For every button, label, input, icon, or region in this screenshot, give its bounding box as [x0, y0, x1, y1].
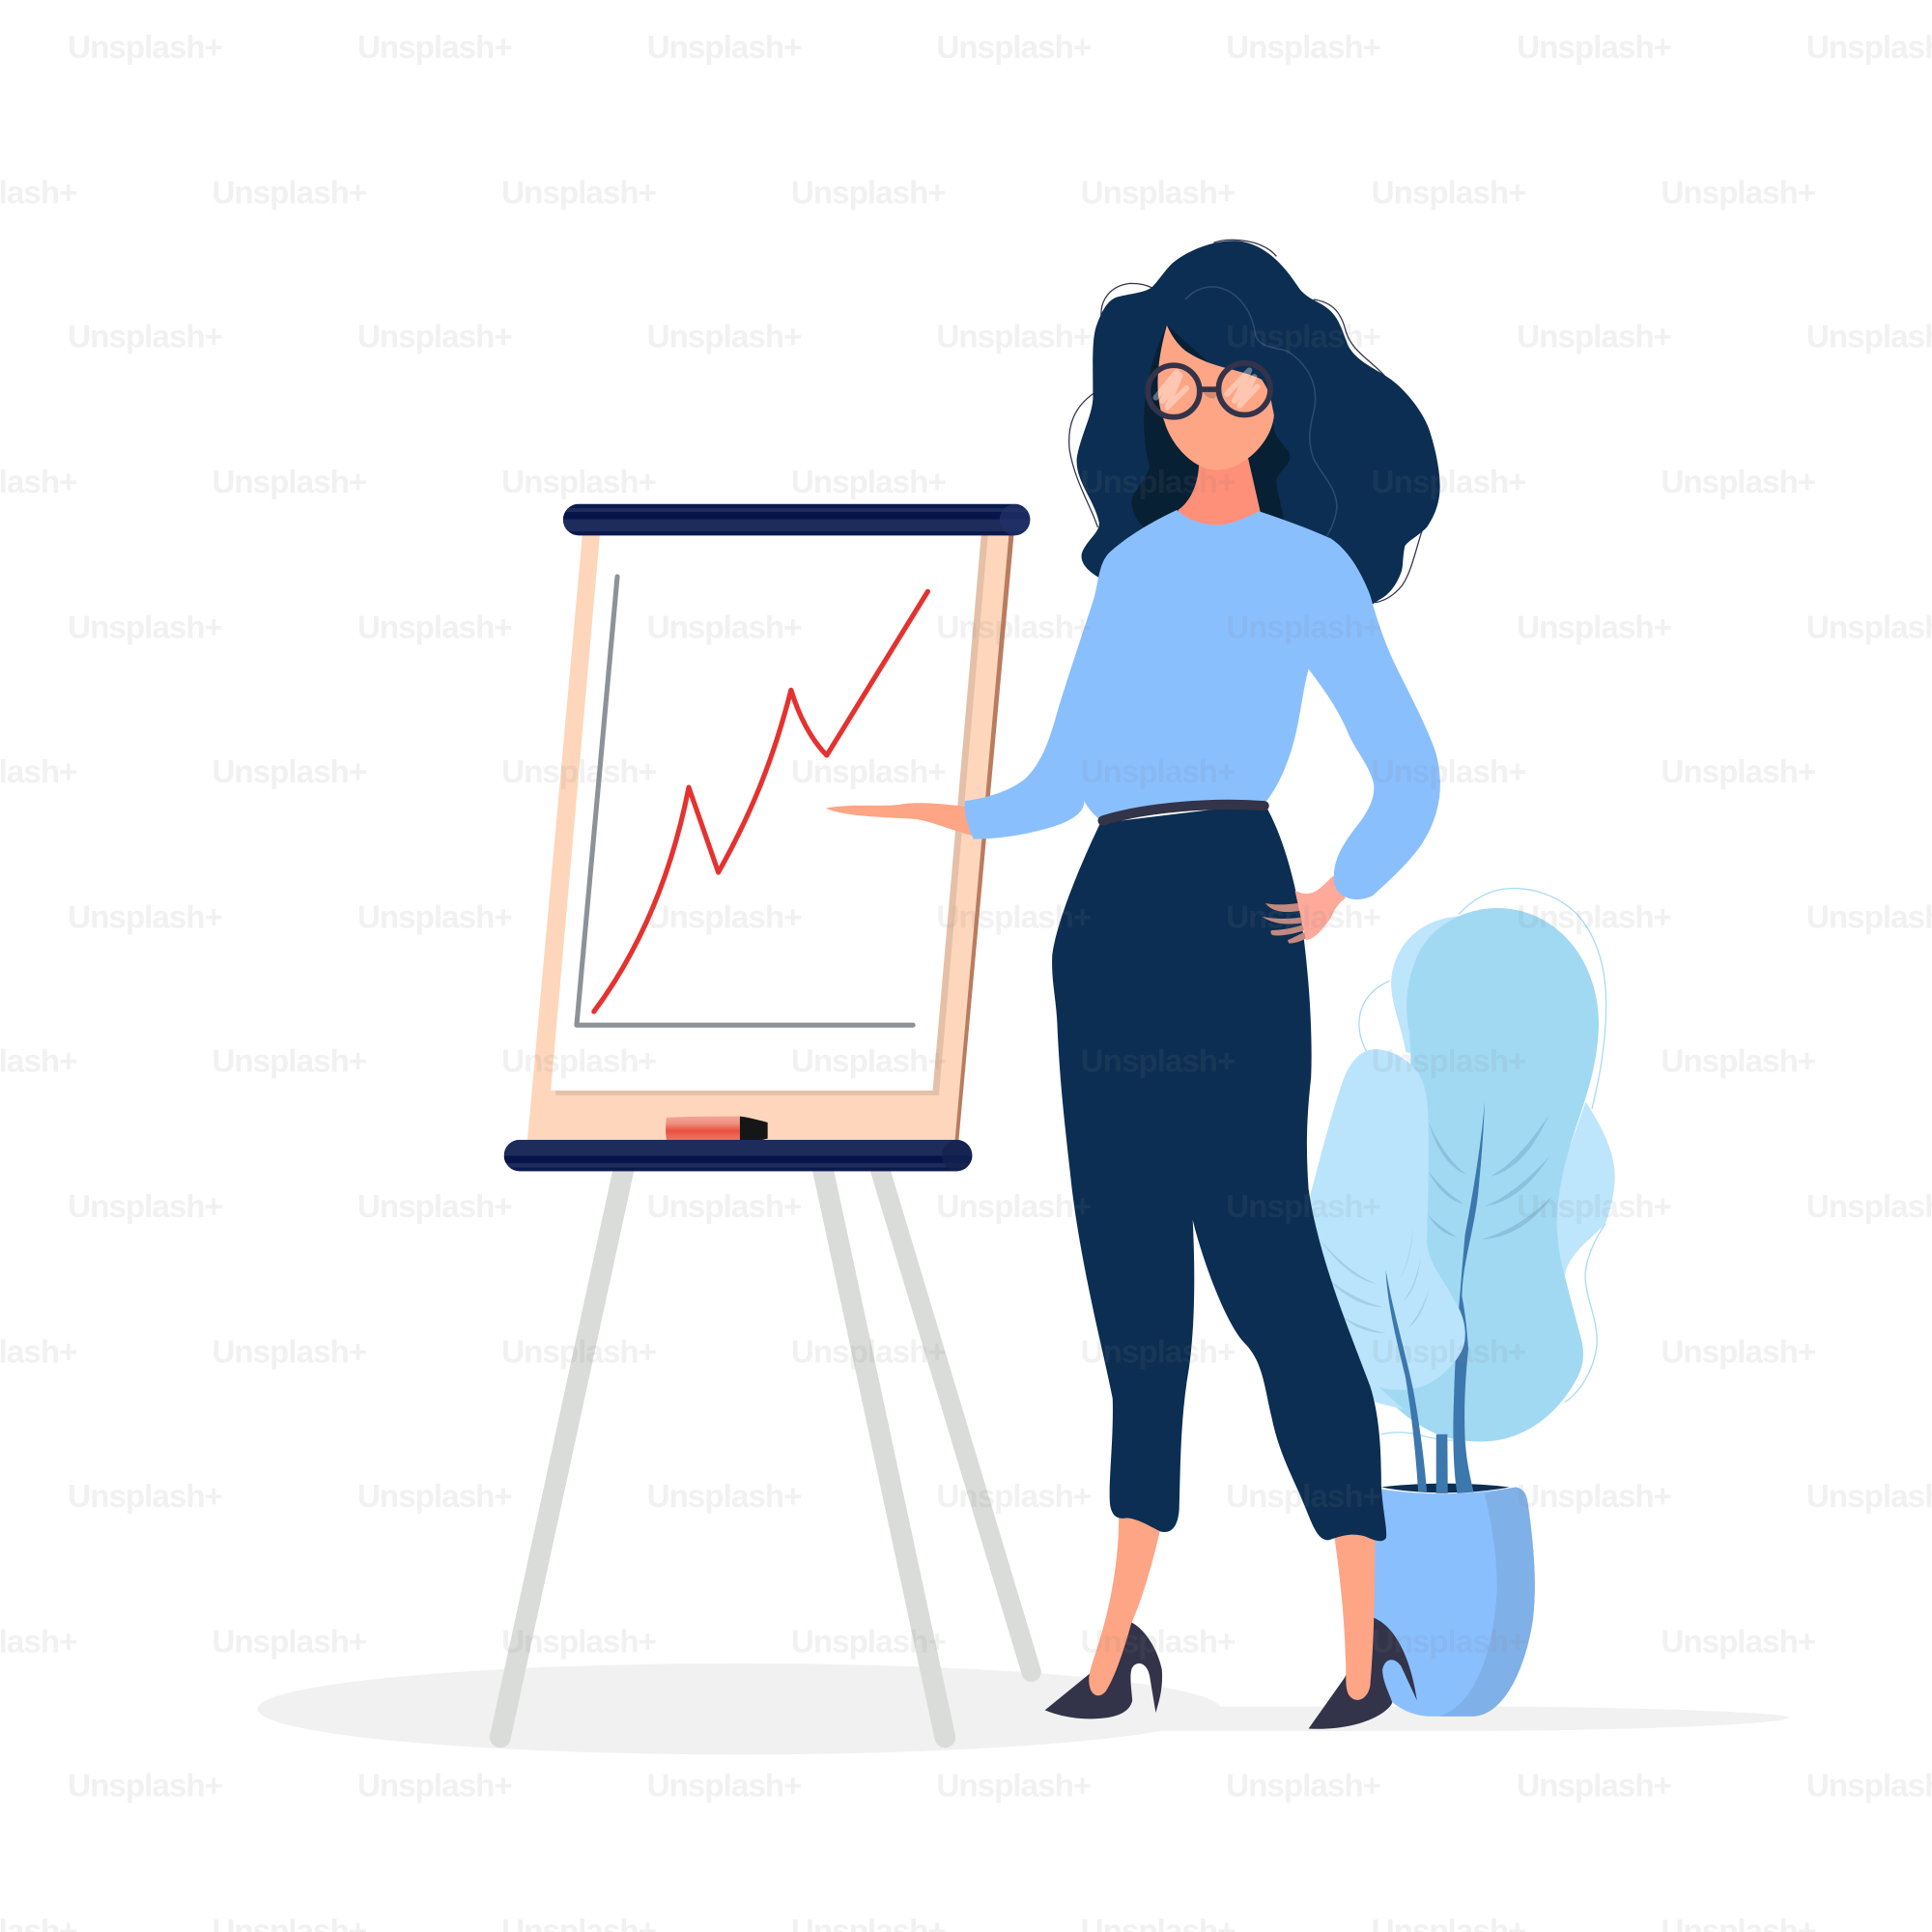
watermark pattern: Unsplash+: [1372, 754, 1526, 790]
watermark pattern: Unsplash+: [791, 1044, 946, 1080]
watermark pattern: Unsplash+: [936, 320, 1092, 355]
left leg: [1089, 1509, 1161, 1695]
watermark pattern: Unsplash+: [1226, 1479, 1381, 1515]
watermark pattern: Unsplash+: [936, 30, 1092, 66]
watermark pattern: Unsplash+: [791, 465, 946, 500]
face: [1157, 326, 1274, 470]
watermark pattern: Unsplash+: [1226, 899, 1381, 935]
watermark pattern: Unsplash+: [791, 1624, 946, 1660]
watermark pattern: Unsplash+: [357, 320, 512, 355]
paper: [551, 532, 981, 1091]
watermark pattern: Unsplash+: [1081, 754, 1236, 790]
left shoe: [1045, 1622, 1162, 1719]
watermark pattern: Unsplash+: [1372, 175, 1526, 211]
hair outline strokes: [1069, 240, 1422, 603]
watermark pattern: Unsplash+: [936, 1189, 1092, 1225]
watermark pattern: Unsplash+: [936, 899, 1092, 935]
watermark pattern: Unsplash+: [647, 1189, 802, 1225]
neck: [1178, 458, 1261, 532]
plant pot: [1365, 1484, 1535, 1717]
long stem: [1453, 1101, 1485, 1493]
watermark pattern: Unsplash+: [212, 1044, 367, 1080]
watermark pattern: Unsplash+: [936, 1479, 1092, 1515]
watermark pattern: Unsplash+: [647, 30, 802, 66]
watermark pattern: Unsplash+: [1226, 30, 1381, 66]
watermark pattern: Unsplash+: [357, 1479, 512, 1515]
watermark pattern: Unsplash+: [1517, 899, 1672, 935]
watermark pattern: Unsplash+: [1081, 1044, 1236, 1080]
watermark pattern: Unsplash+: [1372, 1044, 1526, 1080]
watermark pattern: Unsplash+: [68, 320, 223, 355]
watermark pattern: Unsplash+: [501, 754, 657, 790]
watermark pattern: Unsplash+: [936, 611, 1092, 646]
watermark pattern: Unsplash+: [647, 611, 802, 646]
watermark pattern: Unsplash+: [357, 611, 512, 646]
watermark pattern: Unsplash+: [68, 1769, 223, 1804]
marker: [666, 1117, 768, 1140]
pointing hand: [826, 803, 972, 836]
plant leaves: [1307, 889, 1615, 1493]
watermark pattern: Unsplash+: [501, 1624, 657, 1660]
watermark pattern: Unsplash+: [357, 30, 512, 66]
hair: [1077, 241, 1440, 616]
ground shadows: [258, 1663, 1789, 1754]
middle stem: [1436, 1435, 1448, 1493]
right leg: [1333, 1528, 1375, 1700]
watermark pattern: Unsplash+: [501, 1044, 657, 1080]
watermark pattern: Unsplash+: [1661, 1335, 1816, 1371]
watermark pattern: Unsplash+: [791, 1335, 946, 1371]
watermark pattern: Unsplash+: [357, 1769, 512, 1804]
watermark pattern: Unsplash+: [212, 1624, 367, 1660]
centre leaf veins: [1428, 1115, 1552, 1239]
pot shaded side: [1439, 1488, 1535, 1717]
hip hand: [1263, 876, 1346, 944]
easel legs: [500, 1164, 1032, 1737]
watermark pattern: Unsplash+: [647, 899, 802, 935]
frames: [1148, 363, 1270, 417]
watermark pattern: Unsplash+: [1081, 1335, 1236, 1371]
watermark pattern: Unsplash+: [1517, 1769, 1672, 1804]
watermark pattern: Unsplash+: [1372, 1624, 1526, 1660]
leaf outlines: [1359, 889, 1606, 1440]
watermark pattern: Unsplash+: [212, 754, 367, 790]
left pale leaf: [1307, 1049, 1465, 1409]
watermark pattern: Unsplash+: [68, 1189, 223, 1225]
watermark pattern: Unsplash+: [1226, 611, 1381, 646]
nose shadow: [1203, 391, 1218, 399]
left leaf veins: [1321, 1227, 1430, 1333]
watermark pattern: Unsplash+: [1661, 1624, 1816, 1660]
watermark pattern: Unsplash+: [1517, 611, 1672, 646]
watermark pattern: Unsplash+: [647, 1479, 802, 1515]
watermark pattern: Unsplash+: [501, 175, 657, 211]
watermark pattern: Unsplash+: [1372, 465, 1526, 500]
watermark pattern: Unsplash+: [1226, 1769, 1381, 1804]
hair strand line: [1185, 287, 1337, 536]
watermark pattern: Unsplash+: [501, 1335, 657, 1371]
fingers: [1263, 903, 1307, 944]
watermark pattern: Unsplash+: [647, 1769, 802, 1804]
watermark pattern: Unsplash+: [68, 1479, 223, 1515]
watermark pattern: Unsplash+: [1661, 175, 1816, 211]
watermark pattern: Unsplash+: [1661, 754, 1816, 790]
watermark pattern: Unsplash+: [647, 320, 802, 355]
trousers: [1052, 804, 1386, 1541]
flip chart board: [504, 504, 1031, 1173]
top bar: [563, 504, 1031, 536]
pot opening: [1381, 1484, 1509, 1492]
watermark pattern: Unsplash+: [212, 465, 367, 500]
watermark pattern: Unsplash+: [501, 465, 657, 500]
watermark pattern: Unsplash+: [1517, 320, 1672, 355]
right shoe: [1309, 1618, 1417, 1729]
watermark pattern: Unsplash+: [212, 1335, 367, 1371]
watermark pattern: Unsplash+: [1081, 175, 1236, 211]
watermark pattern: Unsplash+: [1226, 1189, 1381, 1225]
glasses: [1148, 363, 1270, 417]
watermark pattern: Unsplash+: [1661, 1044, 1816, 1080]
belt: [1103, 805, 1264, 820]
watermark pattern: Unsplash+: [1661, 465, 1816, 500]
bottom bar: [504, 1140, 973, 1173]
pot body: [1365, 1488, 1535, 1717]
watermark pattern: Unsplash+: [212, 175, 367, 211]
back pale leaf: [1391, 916, 1479, 1060]
watermark pattern: Unsplash+: [1081, 1624, 1236, 1660]
chart axes: [577, 577, 913, 1025]
watermark pattern: Unsplash+: [1517, 1189, 1672, 1225]
blouse: [965, 510, 1440, 899]
watermark pattern: Unsplash+: [1226, 320, 1381, 355]
board right edge: [955, 532, 1014, 1141]
back hair shade: [1131, 326, 1290, 542]
paper shadow: [555, 532, 988, 1095]
woman presenter: [826, 240, 1440, 1729]
watermark pattern: Unsplash+: [357, 899, 512, 935]
growth line: [594, 591, 927, 1011]
palm: [1295, 876, 1346, 940]
watermark pattern: Unsplash+: [68, 30, 223, 66]
watermark pattern: Unsplash+: [68, 899, 223, 935]
right pale leaf: [1540, 1101, 1615, 1276]
centre blue leaf: [1378, 908, 1599, 1441]
watermark pattern: Unsplash+: [1372, 1335, 1526, 1371]
watermark pattern: Unsplash+: [1081, 465, 1236, 500]
watermark pattern: Unsplash+: [68, 611, 223, 646]
watermark pattern: Unsplash+: [1517, 1479, 1672, 1515]
lens reflections: [1155, 370, 1258, 408]
watermark pattern: Unsplash+: [791, 754, 946, 790]
watermark pattern: Unsplash+: [1517, 30, 1672, 66]
watermark pattern: Unsplash+: [791, 175, 946, 211]
watermark pattern: Unsplash+: [936, 1769, 1092, 1804]
short stem: [1385, 1270, 1427, 1492]
watermark pattern: Unsplash+: [357, 1189, 512, 1225]
board frame: [527, 529, 1012, 1141]
